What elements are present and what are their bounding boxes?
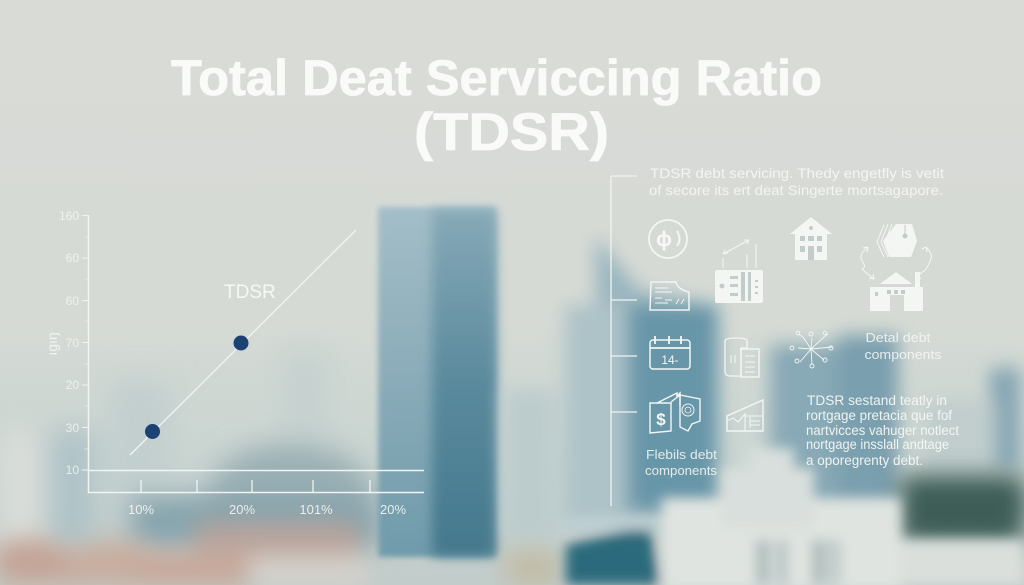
icon: panel with arrows [715,240,763,303]
icon: layered tag with arrows [861,224,931,279]
icon: coin: ϕ [656,228,672,251]
intro text [649,166,944,198]
icon: network burst [790,331,833,368]
description text: nortgage insslall andtage [806,437,949,452]
y axis labels: 60 [66,251,79,265]
icon: coin [649,220,687,258]
intro text: TDSR debt servicing. Thedy engetfly is vetit [650,166,944,181]
icon: house [790,217,832,260]
icon: calendar [650,336,690,369]
y axis labels: 20 [66,378,79,392]
description text: rortgage pretacia que fof [806,408,952,423]
x axis labels: 101% [299,502,333,517]
y axis labels: 10 [66,463,79,477]
description text: nartvicces vahuger notlect [806,423,959,438]
x axis labels: 20% [229,502,255,517]
bracket connector [611,176,637,506]
icon: factory house [870,272,923,311]
y axis labels [59,209,79,477]
icon: calendar: 14- [661,353,679,367]
description text: a oporegrenty debt. [806,453,923,468]
y axis title: ıgıŋ [44,332,60,356]
x axis labels [128,502,406,517]
icon grid [649,217,931,433]
icon: documents [725,338,759,377]
trend line [130,230,356,455]
x axis labels: 10% [128,502,154,517]
title: (TDSR) [414,103,609,162]
intro text: of secore its ert deat Singerte mortsagapore. [649,183,943,198]
y axis and baselines [82,215,424,492]
icon: money folder: $ [656,410,666,429]
label: flexible components: components [645,463,718,478]
label: flexible components: Flebils debt [646,447,717,462]
data points [145,336,248,439]
label: detail components [864,330,942,362]
icon: money folder [650,393,700,433]
icon: rising chart [727,400,763,431]
series label: TDSR [224,282,276,303]
description text [806,393,959,468]
line chart [44,209,424,517]
icon: document [650,282,689,310]
label: flexible components [645,447,718,478]
y axis labels: 30 [66,421,79,435]
title [171,50,822,162]
title: Total Deat Serviccing Ratio [171,50,822,106]
label: detail components: components [864,347,942,362]
x axis labels: 20% [380,502,406,517]
description text: TDSR sestand teatly in [807,393,947,408]
y axis labels: 160 [59,209,79,223]
label: detail components: Detal debt [866,330,931,345]
y axis labels: 60 [66,294,79,308]
y axis labels: 70 [66,336,79,350]
